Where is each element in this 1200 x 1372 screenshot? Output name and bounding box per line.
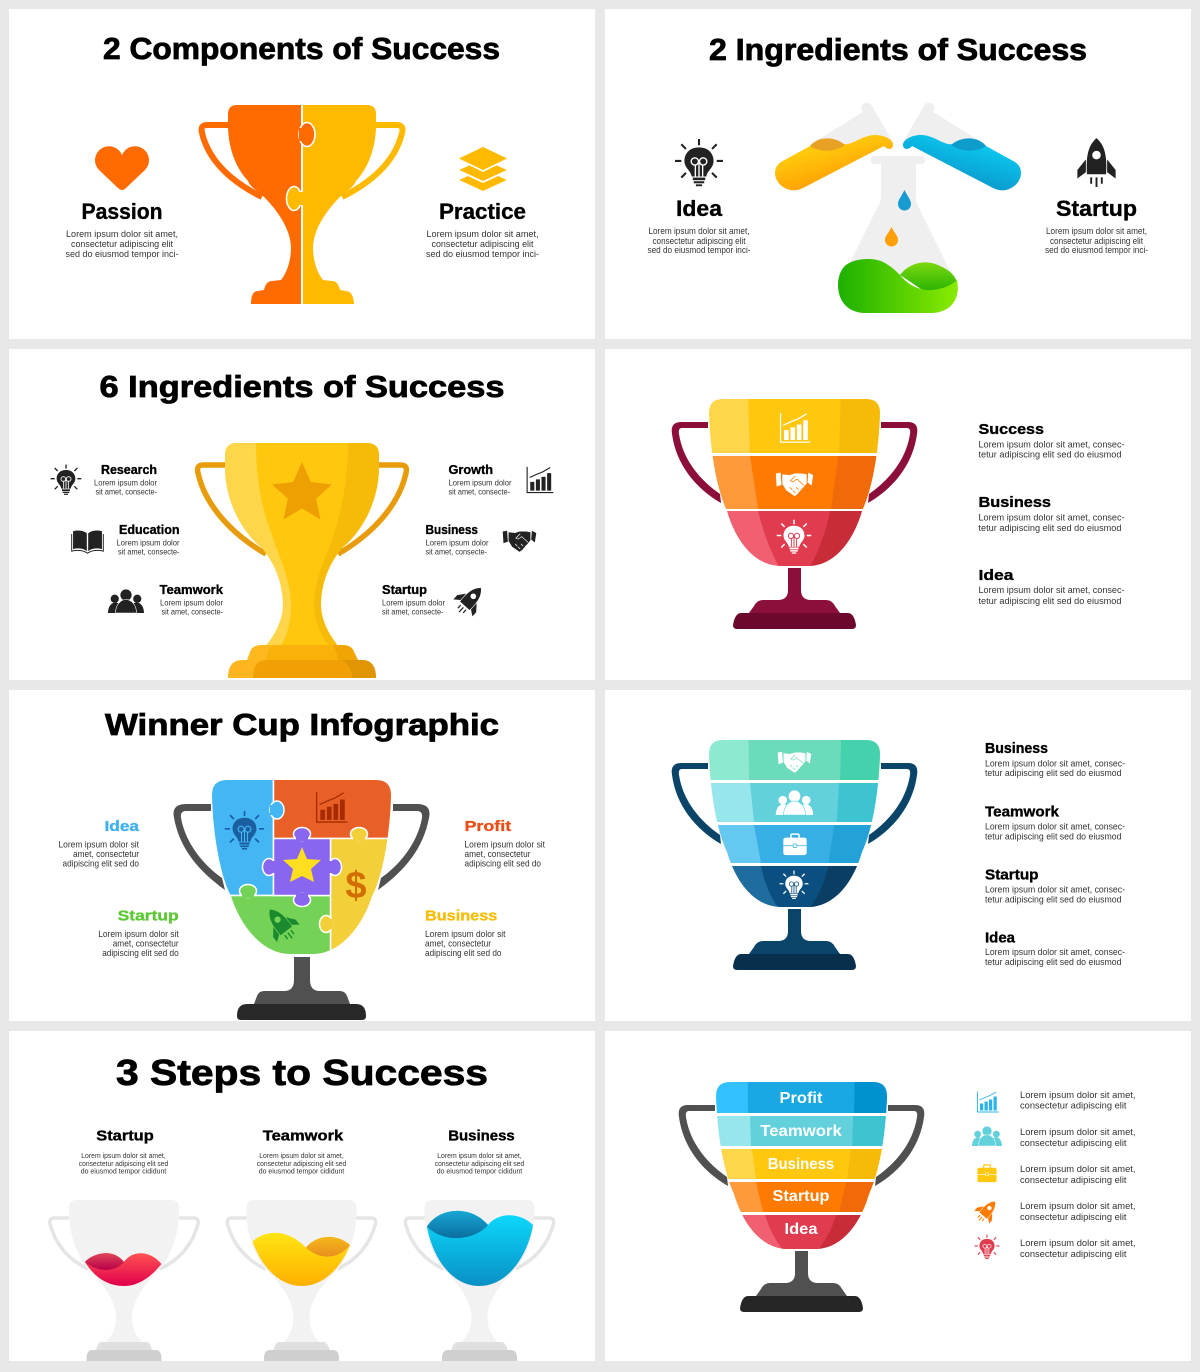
text block: passion: consectetur adipiscing elit xyxy=(71,239,173,249)
title: 2 Ingredients of Success xyxy=(709,32,1087,67)
text block: business xyxy=(435,1128,524,1176)
text block: idea: Idea xyxy=(104,818,140,835)
tube: blue xyxy=(902,103,1021,190)
icon: rocket xyxy=(259,901,303,947)
text block: passion: Passion xyxy=(82,199,162,224)
text block: profit xyxy=(464,818,545,868)
layer: teamwork xyxy=(710,783,878,822)
layer: idea xyxy=(742,1215,861,1249)
trophy: red fill xyxy=(50,1200,198,1361)
text block: startup: Startup xyxy=(382,582,427,597)
text block: business: sit amet, consecte- xyxy=(426,548,487,556)
icon: layers xyxy=(457,146,509,192)
layer: teamwork xyxy=(717,1116,886,1146)
text block: startup xyxy=(1045,196,1148,255)
text block: teamwork: consectetur adipiscing elit sed xyxy=(257,1159,346,1168)
text block: startup: sed do eiusmod tempor inci- xyxy=(1045,245,1148,255)
panel: 2 ingredients of success xyxy=(605,9,1191,339)
text block: startup: consectetur adipiscing elit xyxy=(1050,236,1143,246)
text block: business: Lorem ipsum dolor xyxy=(426,538,489,548)
text block: startup: Startup xyxy=(985,867,1038,884)
icon: chart xyxy=(317,792,347,822)
handles xyxy=(672,422,917,503)
text block: row 1: consectetur adipiscing elit xyxy=(1020,1101,1127,1112)
text block: row 1: Lorem ipsum dolor sit amet, xyxy=(1020,1090,1136,1101)
text block: startup: Startup xyxy=(1056,196,1137,221)
text block: idea xyxy=(648,196,750,255)
icon: heart xyxy=(95,146,149,190)
title: Winner Cup Infographic xyxy=(105,707,499,742)
text block: row 5 xyxy=(1020,1238,1136,1260)
icon: chart xyxy=(527,467,553,492)
text block: startup xyxy=(79,1128,168,1176)
icon: bulb xyxy=(225,811,264,850)
icon: dollar: $ xyxy=(345,865,367,907)
icon: handshake xyxy=(778,752,811,773)
text block: profit: Lorem ipsum dolor sit xyxy=(464,840,545,850)
text block: research: Lorem ipsum dolor xyxy=(94,478,157,488)
text block: business xyxy=(978,494,1124,533)
text block: row 2: consectetur adipiscing elit xyxy=(1020,1138,1127,1149)
icon: briefcase xyxy=(783,834,807,855)
text block: practice xyxy=(426,199,539,259)
text block: startup xyxy=(98,908,179,958)
text block: row 4: Lorem ipsum dolor sit amet, xyxy=(1020,1201,1136,1212)
icon: bulb xyxy=(975,1235,999,1259)
handles xyxy=(174,804,430,890)
text block: idea xyxy=(985,930,1125,967)
text block: idea: Idea xyxy=(985,930,1016,947)
text block: practice: Practice xyxy=(439,199,526,224)
layer: business xyxy=(721,1149,882,1179)
tube: orange xyxy=(775,103,894,190)
icon: team xyxy=(108,589,144,613)
handles xyxy=(672,763,917,844)
text block: business: Business xyxy=(978,494,1051,511)
cup layers xyxy=(709,740,880,907)
icon: bulb xyxy=(780,871,808,899)
layer: idea xyxy=(727,511,862,566)
text block: startup: Lorem ipsum dolor sit amet, xyxy=(1046,226,1147,236)
text block: success: Lorem ipsum dolor sit amet, consec- xyxy=(978,440,1124,450)
layer: startup xyxy=(729,1182,874,1212)
panel: 2 components of success xyxy=(9,9,595,339)
text block: startup: sit amet, consecte- xyxy=(382,608,444,616)
text block: idea: amet, consectetur xyxy=(73,849,139,859)
label: teamwork: Teamwork xyxy=(760,1123,842,1140)
drop: blue xyxy=(898,190,911,211)
text block: teamwork: Lorem ipsum dolor sit amet, xyxy=(259,1151,344,1160)
text block: idea: tetur adipiscing elit sed do eiusmod xyxy=(985,957,1122,967)
text block: row 4 xyxy=(1020,1201,1136,1223)
text block: idea: tetur adipiscing elit sed do eiusmod xyxy=(978,596,1122,606)
text block: success: tetur adipiscing elit sed do eiusmod xyxy=(978,450,1122,460)
icon: briefcase xyxy=(977,1165,997,1182)
icon: rocket xyxy=(1077,138,1116,187)
trophy: yellow fill xyxy=(227,1200,376,1361)
text block: startup: consectetur adipiscing elit sed xyxy=(79,1159,168,1168)
text block: startup: do eiusmod tempor cididunt xyxy=(81,1166,167,1176)
puzzle trophy xyxy=(202,105,402,304)
stem and base xyxy=(237,957,366,1020)
text block: growth: Lorem ipsum dolor xyxy=(448,478,512,488)
icon: lightbulb xyxy=(675,139,723,186)
text block: row 3 xyxy=(1020,1164,1136,1186)
text block: business: adipiscing elit sed do xyxy=(425,948,502,958)
panel: four-layer trophy xyxy=(605,690,1191,1021)
text block: education xyxy=(116,522,180,556)
text block: startup: Lorem ipsum dolor sit amet, xyxy=(81,1151,166,1160)
text block: row 2: Lorem ipsum dolor sit amet, xyxy=(1020,1127,1136,1138)
text block: profit: adipiscing elit sed do xyxy=(464,858,541,868)
text block: idea: sed do eiusmod tempor inci- xyxy=(648,245,750,255)
text block: startup xyxy=(985,867,1125,904)
text block: business: Lorem ipsum dolor sit amet, consec- xyxy=(985,758,1125,768)
text block: practice: Lorem ipsum dolor sit amet, xyxy=(426,229,538,239)
icon: team xyxy=(972,1126,1002,1146)
text block: growth xyxy=(448,462,512,496)
text block: success: Success xyxy=(978,421,1044,438)
drop: orange xyxy=(885,227,898,246)
text block: business xyxy=(985,740,1125,778)
label: idea: Idea xyxy=(784,1221,818,1238)
icon: chart xyxy=(781,413,810,442)
piece: idea xyxy=(212,780,273,895)
text block: education: Lorem ipsum dolor xyxy=(116,538,180,548)
text block: row 3: consectetur adipiscing elit xyxy=(1020,1175,1127,1186)
text block: teamwork: Teamwork xyxy=(263,1128,344,1145)
title: 6 Ingredients of Success xyxy=(100,369,505,404)
text block: row 3: Lorem ipsum dolor sit amet, xyxy=(1020,1164,1136,1175)
text block: idea: Lorem ipsum dolor sit amet, xyxy=(648,226,750,236)
text block: business: tetur adipiscing elit sed do eiusmod xyxy=(985,768,1122,778)
text block: practice: consectetur adipiscing elit xyxy=(432,239,534,249)
text block: business: do eiusmod tempor cididunt xyxy=(437,1166,523,1176)
icon: rocket xyxy=(450,579,490,621)
text block: education: Education xyxy=(119,522,180,537)
text block: business: amet, consectetur xyxy=(425,938,491,948)
stem and base xyxy=(740,1251,863,1312)
text block: growth: Growth xyxy=(448,462,493,477)
layer: profit xyxy=(716,1082,887,1113)
text block: row 5: Lorem ipsum dolor sit amet, xyxy=(1020,1238,1136,1249)
text block: passion: sed do eiusmod tempor inci- xyxy=(66,249,178,259)
text block: idea: Lorem ipsum dolor sit amet, consec- xyxy=(985,947,1125,957)
text block: startup: Lorem ipsum dolor xyxy=(382,598,445,608)
text block: education: sit amet, consecte- xyxy=(118,548,180,556)
icon: bulb xyxy=(51,465,81,495)
text block: business: Business xyxy=(448,1128,515,1145)
text block: row 5: consectetur adipiscing elit xyxy=(1020,1249,1127,1260)
text block: startup: amet, consectetur xyxy=(113,938,179,948)
text block: research: sit amet, consecte- xyxy=(96,488,157,496)
puzzle tabs xyxy=(240,801,368,932)
icon: team xyxy=(776,790,813,815)
text block: idea: Idea xyxy=(978,567,1014,584)
piece: centre xyxy=(274,838,330,896)
text block: profit: amet, consectetur xyxy=(464,849,530,859)
cup layers xyxy=(716,1082,887,1249)
panel: 6 ingredients of success xyxy=(9,349,595,680)
text block: teamwork xyxy=(257,1128,346,1176)
icon: handshake xyxy=(776,473,813,496)
flask xyxy=(838,156,958,313)
trophy: blue fill xyxy=(405,1200,554,1361)
text block: teamwork: sit amet, consecte- xyxy=(162,608,223,616)
text block: business: Business xyxy=(985,740,1048,757)
cup layers xyxy=(709,399,880,566)
label: startup: Startup xyxy=(772,1188,830,1205)
stem and base xyxy=(733,909,856,970)
text block: passion: Lorem ipsum dolor sit amet, xyxy=(66,229,178,239)
text block: business: tetur adipiscing elit sed do eiusmod xyxy=(978,523,1122,533)
text block: business xyxy=(425,908,506,958)
text block: row 2 xyxy=(1020,1127,1136,1149)
text block: idea: consectetur adipiscing elit xyxy=(652,236,746,246)
panel: three-layer trophy xyxy=(605,349,1191,680)
text block: row 1 xyxy=(1020,1090,1136,1112)
text block: research: Research xyxy=(101,462,157,477)
text block: business: Lorem ipsum dolor sit amet, xyxy=(437,1151,522,1160)
text block: idea: Lorem ipsum dolor sit amet, consec- xyxy=(978,585,1124,595)
text block: teamwork: Teamwork xyxy=(160,582,224,597)
text block: teamwork xyxy=(985,804,1125,842)
text block: idea xyxy=(58,818,140,868)
piece: profit xyxy=(272,780,391,840)
handles xyxy=(679,1105,924,1186)
layer: business xyxy=(709,740,880,780)
text block: business: Lorem ipsum dolor sit xyxy=(425,929,506,939)
text block: teamwork: Lorem ipsum dolor xyxy=(160,598,223,608)
text block: research xyxy=(94,462,157,496)
text block: profit: Profit xyxy=(464,818,511,835)
panel: 3 steps to success xyxy=(9,1031,595,1361)
text block: startup: Startup xyxy=(96,1128,154,1145)
icon: rocket xyxy=(972,1195,1002,1227)
gold trophy xyxy=(198,443,406,678)
text block: teamwork: tetur adipiscing elit sed do eiusmod xyxy=(985,832,1122,842)
icon: bulb xyxy=(777,520,811,554)
text block: success xyxy=(978,421,1124,460)
icon: book xyxy=(72,530,103,553)
label: profit: Profit xyxy=(780,1090,823,1107)
text block: startup: Startup xyxy=(118,908,179,925)
panel: five-layer trophy xyxy=(605,1031,1191,1361)
text block: teamwork: Lorem ipsum dolor sit amet, consec- xyxy=(985,822,1125,832)
text block: startup: Lorem ipsum dolor sit amet, consec- xyxy=(985,884,1125,894)
text block: business: consectetur adipiscing elit sed xyxy=(435,1159,524,1168)
text block: business: Business xyxy=(426,522,478,537)
text block: business: Lorem ipsum dolor sit amet, consec- xyxy=(978,512,1124,522)
icon: handshake xyxy=(503,531,536,552)
layer: briefcase xyxy=(718,825,871,863)
piece: business xyxy=(330,838,388,950)
text block: teamwork: do eiusmod tempor cididunt xyxy=(259,1166,345,1176)
text block: idea: Idea xyxy=(676,196,723,221)
text block: idea: adipiscing elit sed do xyxy=(62,858,139,868)
layer: success xyxy=(709,399,880,453)
text block: teamwork xyxy=(160,582,224,616)
text block: growth: sit amet, consecte- xyxy=(448,488,510,496)
text block: business xyxy=(426,522,489,556)
layer: idea xyxy=(732,866,857,907)
layer: business xyxy=(712,456,876,509)
text block: startup: tetur adipiscing elit sed do eiusmod xyxy=(985,894,1122,904)
text block: idea xyxy=(978,567,1124,606)
icon: chart xyxy=(978,1092,998,1112)
piece: startup xyxy=(230,894,332,954)
text block: startup: adipiscing elit sed do xyxy=(102,948,179,958)
label: business: Business xyxy=(768,1156,834,1173)
text block: practice: sed do eiusmod tempor inci- xyxy=(426,249,539,259)
puzzle cup xyxy=(212,780,391,954)
text block: idea: Lorem ipsum dolor sit xyxy=(58,840,139,850)
text block: row 4: consectetur adipiscing elit xyxy=(1020,1212,1127,1223)
text block: startup: Lorem ipsum dolor sit xyxy=(98,929,179,939)
stem and base xyxy=(733,568,856,629)
panel: winner cup infographic xyxy=(9,690,595,1021)
text block: passion xyxy=(66,199,178,259)
title: 3 Steps to Success xyxy=(116,1052,488,1093)
text block: business: Business xyxy=(425,908,497,925)
title: 2 Components of Success xyxy=(103,31,500,66)
text block: startup xyxy=(382,582,445,616)
text block: teamwork: Teamwork xyxy=(985,804,1060,821)
icon: star xyxy=(283,847,321,882)
